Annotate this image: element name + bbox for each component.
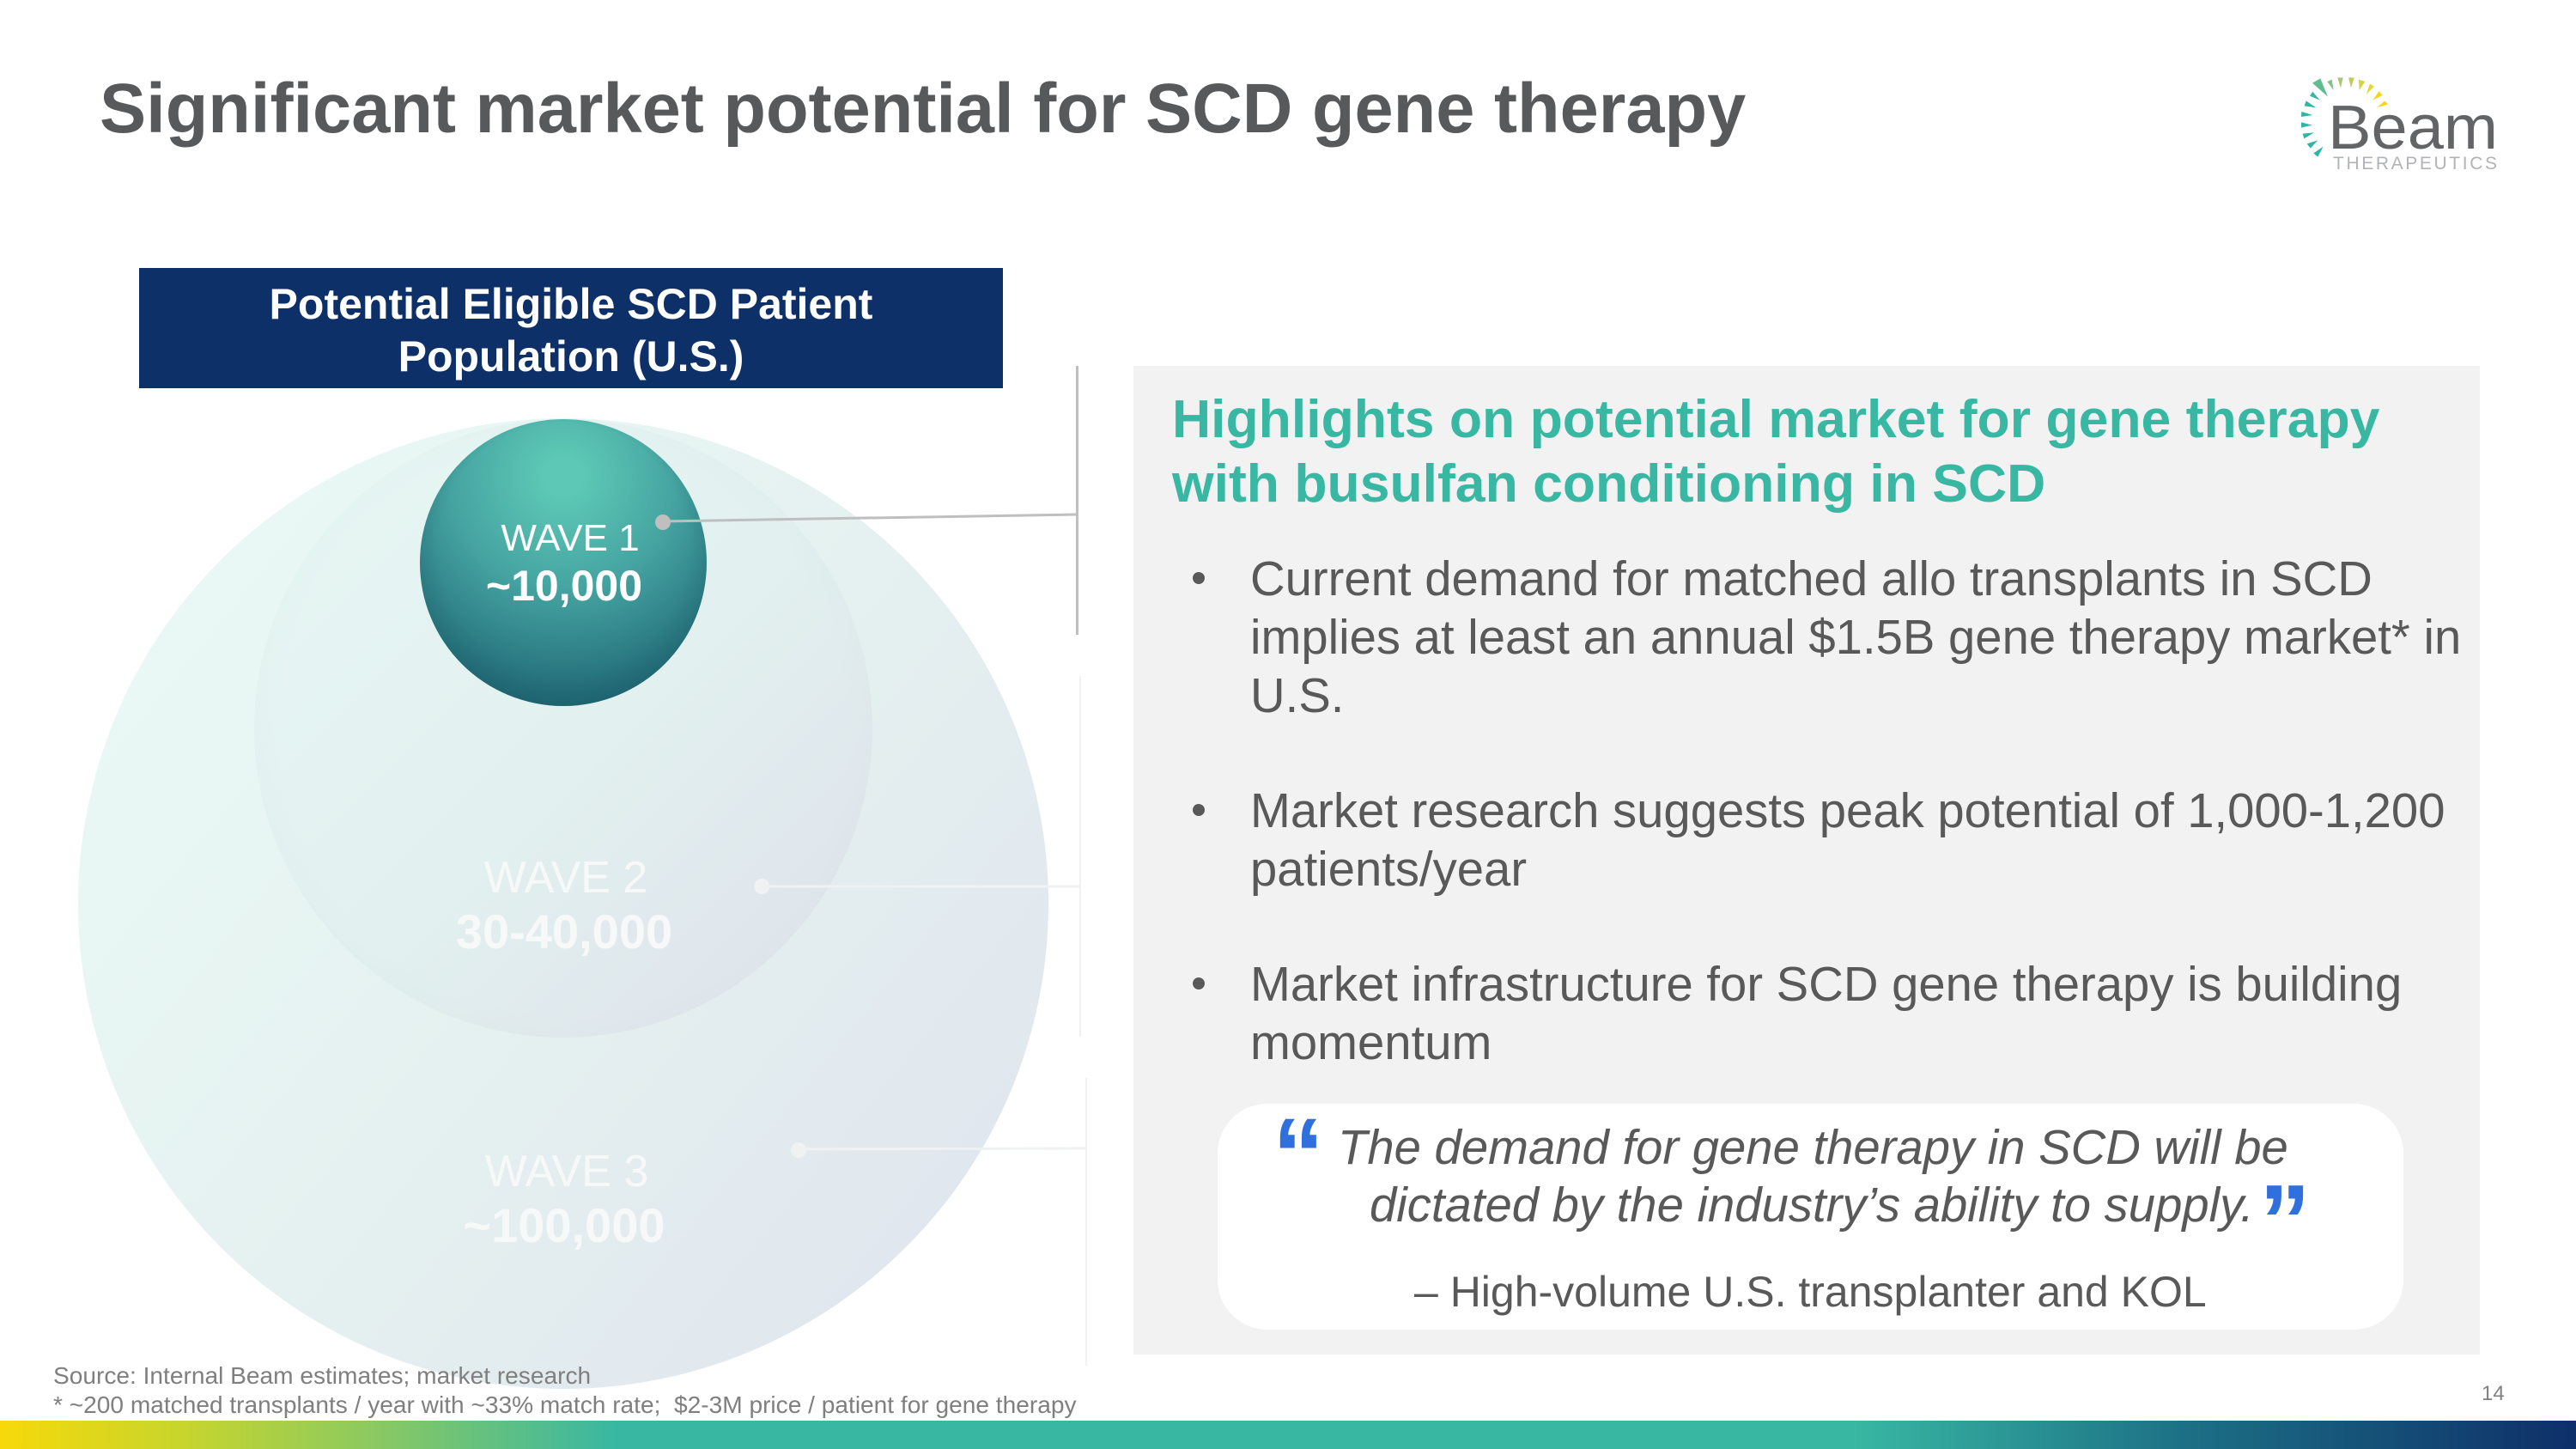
panel: patient population header banner bbox=[139, 268, 1003, 388]
callout connector: wave 3 bbox=[791, 1078, 1087, 1366]
source footnote bbox=[53, 1362, 1077, 1418]
wave 2 label bbox=[456, 853, 672, 959]
bullet: market research: Market research suggests peak potential of 1,000-1,200 bbox=[1250, 783, 2445, 837]
panel heading: with busulfan conditioning in SCD bbox=[1171, 454, 2045, 514]
bullet: market research: patients/year bbox=[1250, 842, 1527, 896]
bullet: infrastructure: momentum bbox=[1250, 1015, 1492, 1069]
callout connector: wave 1 bbox=[655, 366, 1078, 635]
panel heading: Highlights on potential market for gene therapy bbox=[1172, 389, 2380, 449]
bullet: current demand: Current demand for matched allo transplants in SCD bbox=[1250, 551, 2372, 606]
logo wordmark: Beam bbox=[2328, 94, 2498, 162]
callout: transplanter quote: The demand for gene therapy in SCD will be bbox=[1338, 1120, 2288, 1174]
bullet: infrastructure bbox=[1193, 957, 2402, 1069]
panel: market highlights bbox=[1133, 366, 2480, 1355]
panel: patient population header banner: Potential Eligible SCD Patient bbox=[270, 280, 873, 328]
callout connector: wave 2 bbox=[754, 676, 1081, 1037]
callout: transplanter quote bbox=[1218, 1097, 2403, 1330]
wave 3 label: ~100,000 bbox=[463, 1198, 665, 1252]
wave 3 label bbox=[463, 1147, 665, 1252]
wave 1 label: ~10,000 bbox=[486, 562, 642, 610]
wave 1 label bbox=[486, 517, 642, 610]
chart: nested wave circles bbox=[78, 418, 1048, 1389]
panel: patient population header banner: Population (U.S.) bbox=[398, 332, 744, 381]
wave 1 circle bbox=[420, 419, 707, 706]
bullet: infrastructure: Market infrastructure for SCD gene therapy is building bbox=[1250, 957, 2402, 1011]
bullet: market research bbox=[1193, 783, 2445, 896]
opening quote mark: “ bbox=[1273, 1097, 1324, 1212]
callout: transplanter quote: dictated by the industry’s ability to supply. bbox=[1370, 1178, 2254, 1232]
source footnote: Source: Internal Beam estimates; market research bbox=[53, 1362, 591, 1389]
icon: logo sunburst rays bbox=[2301, 77, 2388, 157]
gradient footer bar bbox=[0, 1421, 2576, 1449]
bullet: current demand: implies at least an annual $1.5B gene therapy market* in bbox=[1250, 610, 2461, 664]
bullet: current demand bbox=[1193, 551, 2461, 722]
title: Significant market potential for SCD gene therapy bbox=[100, 70, 1746, 148]
wave 2 label: 30-40,000 bbox=[456, 904, 672, 959]
panel heading bbox=[1171, 389, 2380, 514]
source footnote: * ~200 matched transplants / year with ~33% match rate; $2-3M price / patient for gene therapy bbox=[53, 1391, 1077, 1418]
wave 1 label: WAVE 1 bbox=[501, 517, 640, 559]
wave 3 circle bbox=[78, 418, 1048, 1389]
wave 2 label: WAVE 2 bbox=[484, 853, 647, 903]
logo subtitle: THERAPEUTICS bbox=[2333, 154, 2497, 174]
logo: Beam Therapeutics bbox=[2301, 77, 2498, 174]
wave 2 circle bbox=[254, 419, 872, 1038]
closing quote mark: ” bbox=[2259, 1164, 2311, 1279]
bullet: current demand: U.S. bbox=[1250, 668, 1344, 722]
wave 3 label: WAVE 3 bbox=[485, 1147, 648, 1196]
quote attribution: – High-volume U.S. transplanter and KOL bbox=[1414, 1268, 2207, 1316]
page number: 14 bbox=[2482, 1382, 2505, 1405]
